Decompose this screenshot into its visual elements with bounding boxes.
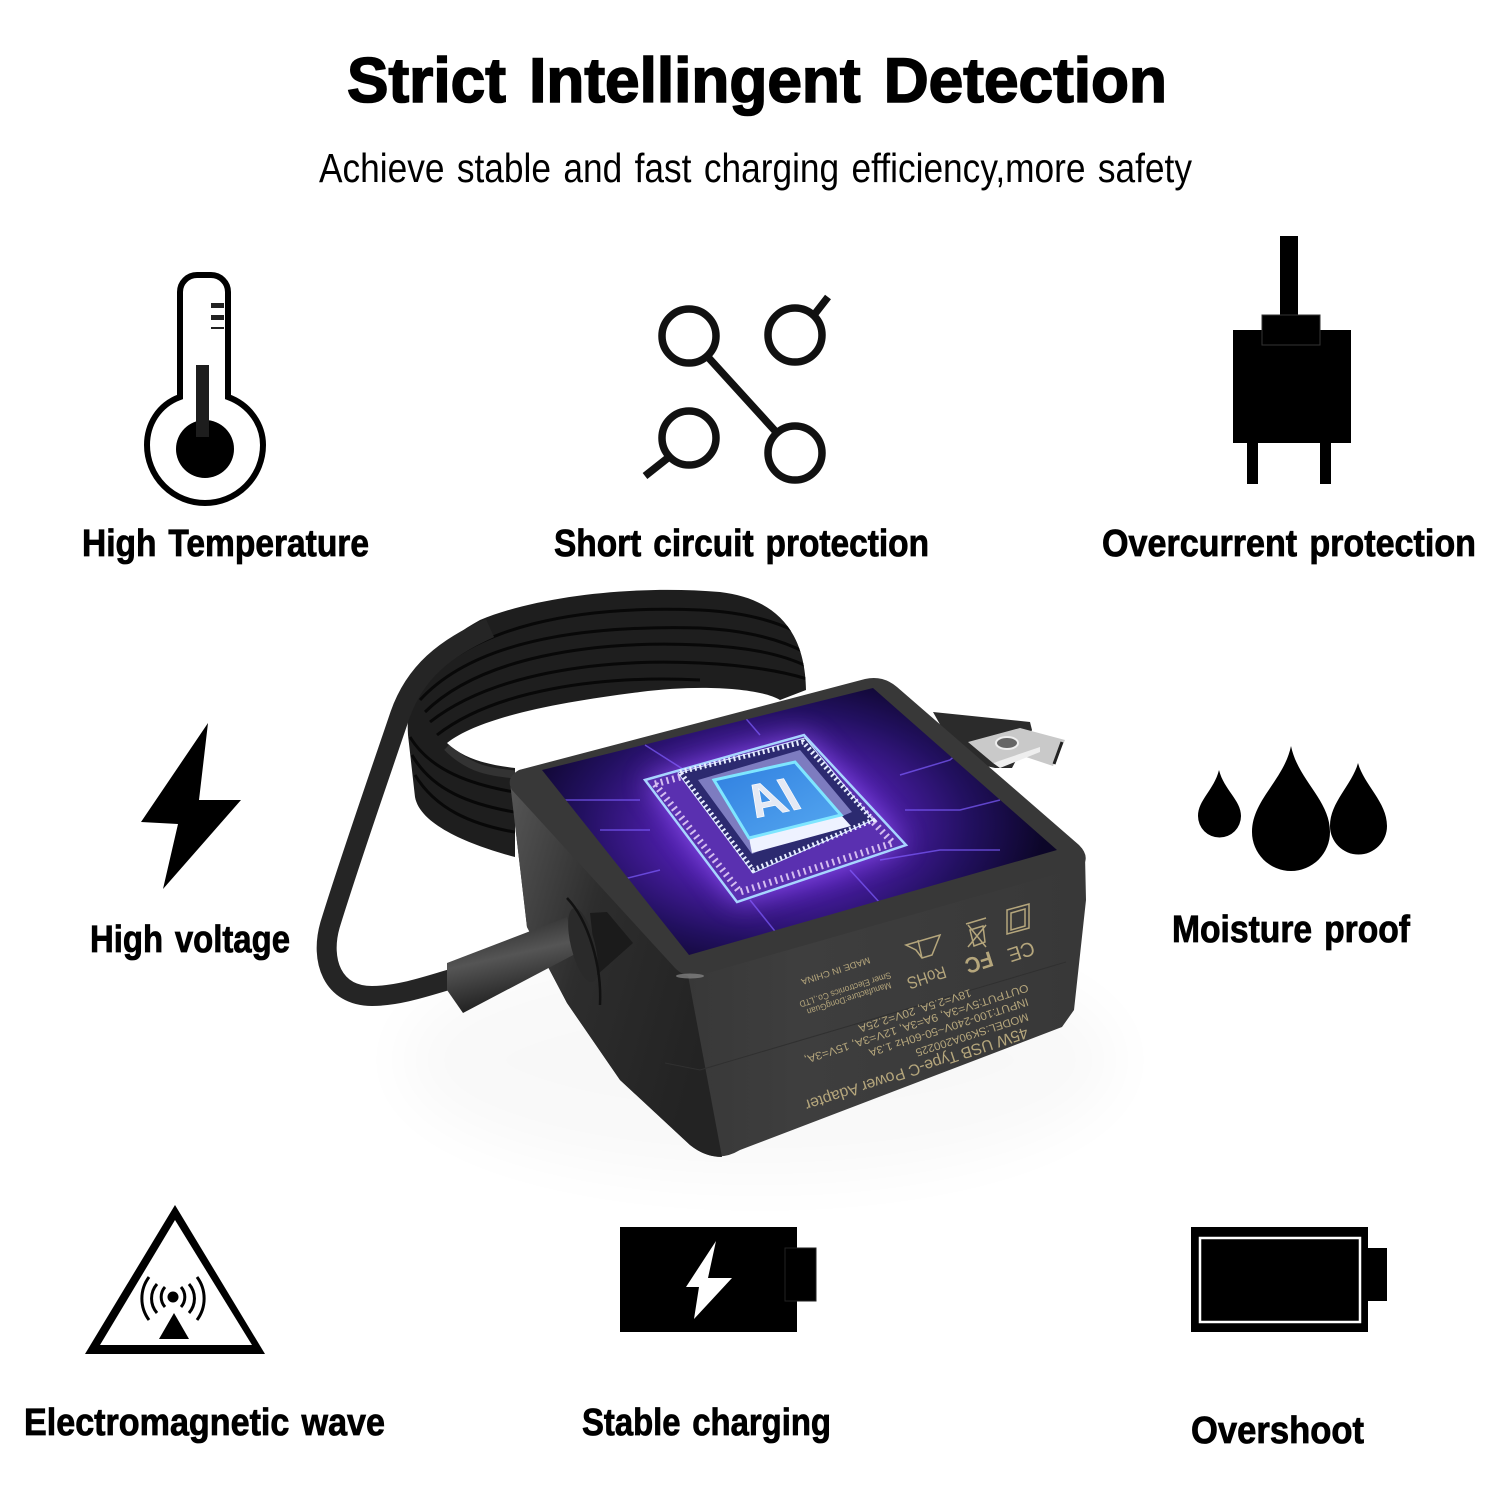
adapter markings: 45W USB Type-C Power Adapter (802, 1023, 1030, 1113)
adapter markings (798, 904, 1037, 1113)
adapter markings: Smer Electronics Co.,LTD (798, 970, 892, 1009)
icon: full battery (1191, 1227, 1387, 1332)
subtitle: Achieve stable and fast charging efficiency,more safety (319, 145, 1192, 191)
label: high voltage: High voltage (90, 919, 290, 961)
product: power adapter with cable (327, 580, 1120, 1180)
adapter left face (510, 782, 722, 1157)
strain relief (447, 898, 633, 1013)
adapter screen (542, 688, 1057, 955)
silver usb-c connector (933, 712, 1065, 768)
adapter seam (665, 962, 1066, 1070)
chip body (698, 750, 852, 854)
icon: plug (1233, 236, 1351, 484)
icon: thermometer (147, 275, 263, 503)
icon: water drops (1198, 746, 1387, 871)
soft shadow (400, 940, 1120, 1180)
outer chip frame (645, 735, 906, 902)
glow (645, 735, 906, 902)
adapter top rim (510, 678, 1086, 976)
icon: electromagnetic warning triangle (85, 1205, 265, 1354)
adapter markings: INPUT:100-240V~50-60Hz 1.3A (867, 995, 1030, 1058)
chip label: AI (733, 768, 810, 828)
adapter markings: CE (1005, 936, 1037, 966)
label: short circuit protection: Short circuit protection (554, 523, 929, 565)
title: Strict Intellingent Detection (347, 46, 1167, 116)
adapter markings: 18V=2.5A, 20V=2.25A (856, 986, 973, 1034)
chip ai tile (714, 762, 841, 838)
circuit traces (565, 719, 1000, 931)
chip ring (678, 738, 873, 873)
label: high temperature: High Temperature (82, 523, 369, 565)
coiled cable (408, 590, 806, 857)
icon: short circuit (645, 297, 828, 480)
cable loop (327, 628, 490, 996)
rim highlight (676, 974, 704, 978)
label: overshoot: Overshoot (1191, 1410, 1364, 1452)
icon: lightning bolt (141, 723, 241, 889)
adapter markings: MODEL:SK90A200225 (914, 1010, 1030, 1058)
adapter markings: RoHS (905, 962, 949, 993)
label: electromagnetic wave: Electromagnetic wave (24, 1402, 385, 1444)
adapter markings: OUTPUT:5V=3A, 9A=3A, 12V=3A, 15V=3A, (803, 981, 1030, 1065)
adapter markings: FC (962, 946, 996, 979)
icon: charging battery (620, 1227, 816, 1332)
adapter markings: Manufacture:DongGuan (806, 980, 892, 1017)
adapter body silhouette (510, 680, 1086, 1156)
label: stable charging: Stable charging (582, 1402, 831, 1444)
label: moisture proof: Moisture proof (1172, 909, 1410, 951)
adapter markings: MADE IN CHINA (800, 955, 871, 987)
